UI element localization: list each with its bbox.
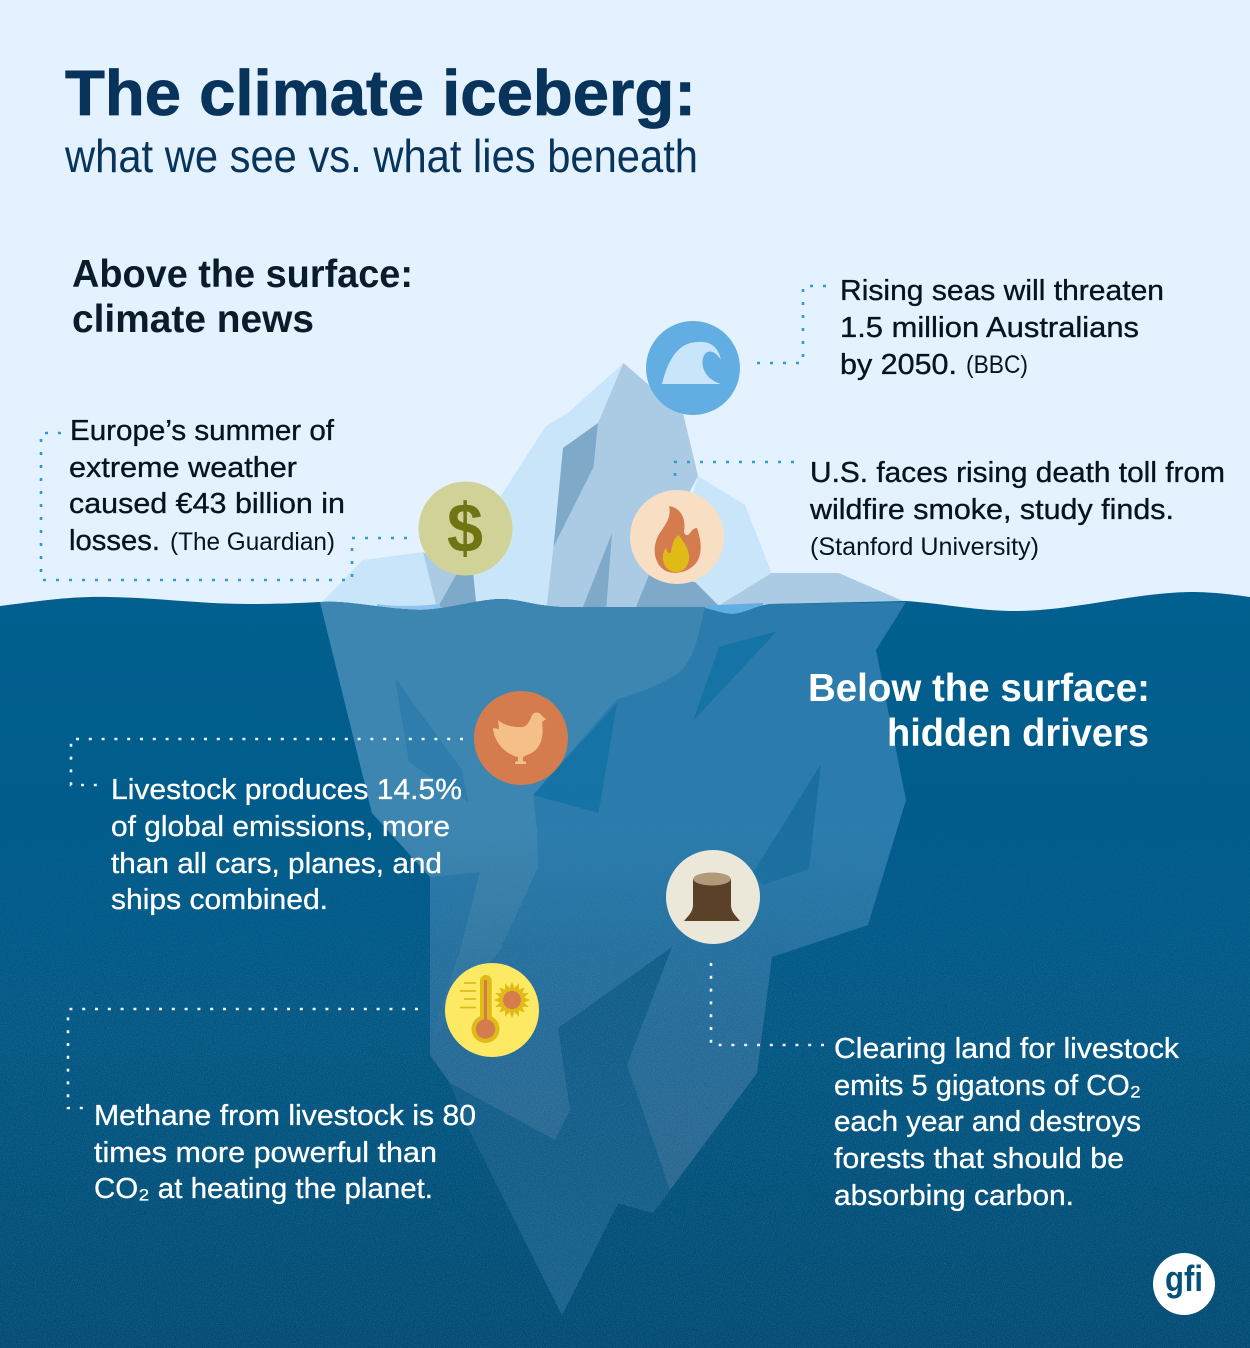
text: clearing land: each year and destroys [834,1106,1141,1138]
text: clearing land: Clearing land for livestock [834,1033,1180,1065]
text: extreme weather: losses. [69,525,160,557]
text: rising seas: 1.5 million Australians [840,312,1139,344]
darker V facet and lower tip [450,947,672,1315]
water grain texture [0,834,1250,1348]
text: rising seas: by 2050. [840,349,957,381]
text: rising seas [840,275,1164,381]
connector: waves [757,286,830,363]
text: livestock emissions: of global emissions, more [111,811,450,843]
connector: fire [675,462,797,476]
dark triangular facet upper right [693,631,777,721]
heading: below the surface [808,667,1150,755]
text: methane: Methane from livestock is 80 [94,1100,476,1132]
text: methane: CO₂ at heating the planet. [94,1173,433,1205]
logo: gfi [1153,1253,1215,1315]
lighter top band of the iceberg [320,599,705,1042]
text: rising seas: Rising seas will threaten [840,275,1164,307]
text: extreme weather: caused €43 billion in [69,488,345,520]
iceberg above water [320,363,906,616]
text: extreme weather [69,415,345,557]
title: what we see vs. what lies beneath [64,130,698,182]
text: clearing land: forests that should be [834,1143,1124,1175]
icon: thermometer and sun [445,963,539,1057]
text: methane: times more powerful than [94,1137,437,1169]
heading: above the surface [72,253,413,341]
text: clearing land: absorbing carbon. [834,1180,1074,1212]
text: livestock emissions: Livestock produces 14.5% [111,774,462,806]
title: The climate iceberg: [65,57,696,129]
iceberg below water [320,599,906,1315]
icon: dollar: $ [447,489,483,567]
heading: above the surface: climate news [72,298,314,341]
text: rising seas: (BBC) [966,351,1028,379]
text: livestock emissions: ships combined. [111,884,328,916]
connector: stump [711,963,825,1045]
connector: thermometer [68,1009,418,1108]
title [64,57,698,182]
text: clearing land: emits 5 gigatons of CO₂ [834,1070,1141,1102]
text: methane [94,1100,476,1205]
heading: below the surface: Below the surface: [808,667,1150,710]
water [0,592,1250,1348]
text: livestock emissions: than all cars, planes, and [111,848,442,880]
heading: above the surface: Above the surface: [72,253,413,296]
logo: gfi: gfi [1165,1258,1203,1299]
heading: below the surface: hidden drivers [887,712,1149,755]
shaded facet left [395,678,468,802]
text: livestock emissions [111,774,462,916]
text: extreme weather: extreme weather [69,452,297,484]
icon: wave [646,321,740,415]
text: wildfire smoke [809,457,1225,561]
text: wildfire smoke: (Stanford University) [810,533,1039,561]
icon: fire [630,490,724,584]
text: clearing land [834,1033,1180,1212]
dark triangular facet centre [533,703,617,813]
text: wildfire smoke: U.S. faces rising death toll from [810,457,1225,489]
icon: chicken [474,691,568,785]
dark facet lower right [753,764,821,885]
text: extreme weather: Europe’s summer of [70,415,335,447]
connector: chicken [71,739,463,785]
text: wildfire smoke: wildfire smoke, study finds. [809,494,1174,526]
icon: tree stump [666,850,760,944]
text: extreme weather: (The Guardian) [170,528,335,556]
connector: dollar [41,433,407,580]
icon: dollar [418,482,512,576]
